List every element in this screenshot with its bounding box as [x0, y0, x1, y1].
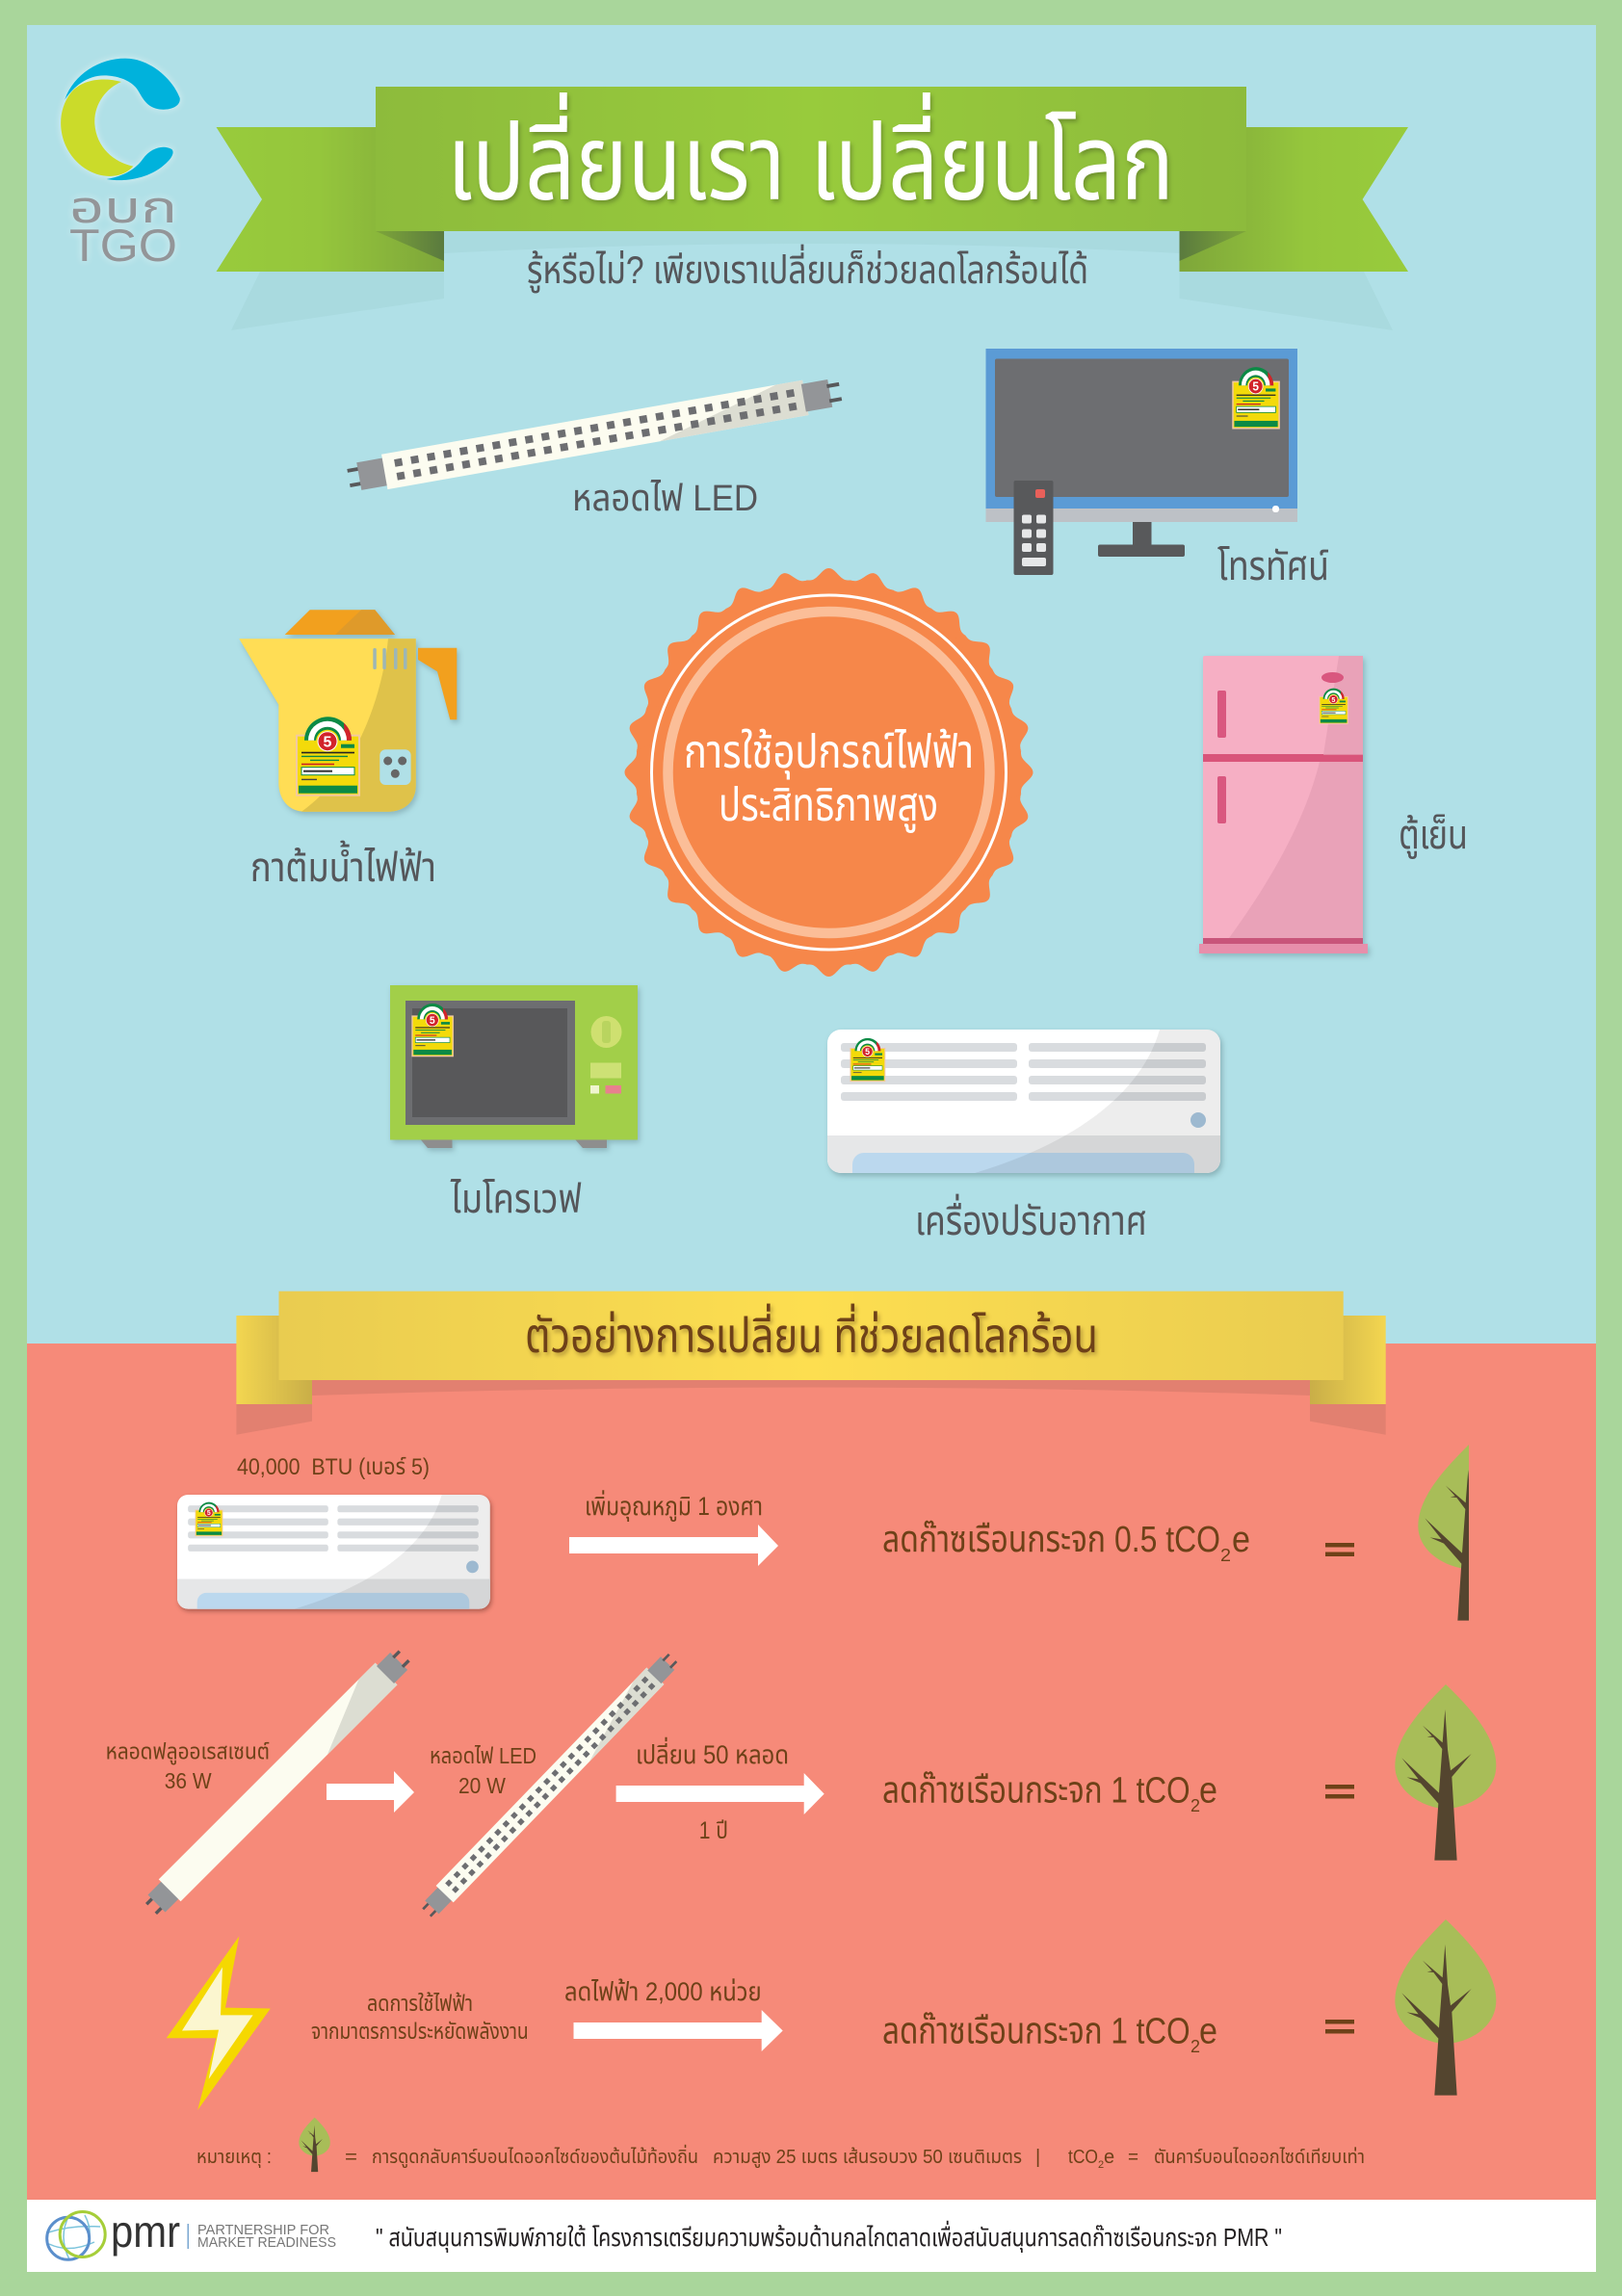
energy label on fridge — [1320, 689, 1348, 724]
ribbon main — [376, 87, 1246, 231]
energy label on AC: 5 — [865, 1047, 870, 1057]
reduction text: ลดก๊าซเรือนกระจก 1 tCO — [882, 2011, 1190, 2051]
legend note: หมายเหตุ : — [196, 2147, 272, 2168]
legend note: ความสูง 25 เมตร เส้นรอบวง 50 เซนติเมตร — [713, 2146, 1022, 2169]
yellow ribbon main — [279, 1292, 1344, 1380]
TV remote — [1013, 481, 1054, 575]
logo: TGO: TGO — [69, 220, 177, 271]
panel: red bottom section — [27, 1344, 1596, 2200]
half tree — [1418, 1445, 1469, 1621]
LED text: หลอดไฟ LED — [430, 1743, 536, 1768]
arrow — [616, 1773, 824, 1814]
logo: PMR: PARTNERSHIP FOR — [197, 2222, 329, 2238]
LED text — [430, 1743, 536, 1798]
LED tube — [418, 1650, 682, 1921]
row 3: electricity saving — [167, 1919, 1496, 2110]
small arrow — [327, 1771, 414, 1813]
legend note: = — [1128, 2147, 1138, 2168]
icon: air conditioner — [827, 1030, 1220, 1173]
reduction text: ลดก๊าซเรือนกระจก 1 tCO — [882, 1771, 1190, 1812]
icon: lightning bolt — [167, 1936, 271, 2110]
reduction text: e — [1199, 1771, 1217, 1812]
reduction text: 2 — [1190, 1796, 1200, 1815]
AC capacity text: 40,000 BTU (เบอร์ 5) — [237, 1454, 430, 1480]
legend note: ตันคาร์บอนไดออกไซด์เทียบเท่า — [1154, 2146, 1365, 2168]
yellow ribbon shadows — [236, 1380, 1386, 1435]
label: LED: หลอดไฟ LED — [572, 479, 758, 519]
equals — [1325, 1785, 1354, 1799]
ribbon reflections — [231, 231, 1393, 330]
energy label on kettle — [296, 717, 360, 796]
energy label on microwave: 5 — [430, 1015, 435, 1027]
saving text: ลดการใช้ไฟฟ้า — [367, 1991, 473, 2016]
title: เปลี่ยนเรา เปลี่ยนโลก — [447, 92, 1174, 222]
subtitle: รู้หรือไม่? เพียงเราเปลี่ยนก็ช่วยลดโลกร้อนได้ — [527, 244, 1088, 293]
reduction text: 2 — [1220, 1546, 1231, 1565]
energy label on fridge: 5 — [1331, 695, 1335, 704]
one year text: 1 ปี — [699, 1817, 728, 1844]
PMR globe — [47, 2211, 105, 2259]
section heading: ตัวอย่างการเปลี่ยน ที่ช่วยลดโลกร้อน — [525, 1303, 1098, 1363]
badge: high efficiency: ประสิทธิภาพสูง — [719, 780, 938, 833]
logo: TGO: อบก — [69, 182, 177, 232]
energy label on kettle: 5 — [324, 735, 332, 751]
green ribbon banner — [216, 87, 1408, 330]
logo: PMR: MARKET READINESS — [197, 2234, 336, 2251]
energy label on TV: 5 — [1252, 379, 1259, 394]
condition text: เพิ่มอุณหภูมิ 1 องศา — [585, 1490, 763, 1522]
label: kettle: กาต้มน้ำไฟฟ้า — [250, 840, 436, 890]
AC small icon — [177, 1495, 490, 1609]
legend note: 2 — [1098, 2159, 1104, 2171]
reduction text: e — [1232, 1520, 1250, 1560]
label: fridge: ตู้เย็น — [1399, 812, 1468, 859]
logo: TGO — [61, 59, 180, 271]
tree — [1395, 1684, 1496, 1861]
legend note: การดูดกลับคาร์บอนไดออกไซด์ของต้นไม้ท้องถิ่น — [372, 2144, 698, 2169]
equals — [1325, 2020, 1354, 2034]
reduction text: 2 — [1190, 2037, 1200, 2056]
energy label on TV — [1232, 367, 1280, 430]
label: air conditioner: เครื่องปรับอากาศ — [915, 1193, 1147, 1243]
row 2: LED replacement — [106, 1645, 1496, 1921]
energy label on AC — [850, 1038, 885, 1082]
legend note — [196, 2118, 1365, 2172]
badge text: การใช้อุปกรณ์ไฟฟ้า — [684, 727, 974, 780]
fluorescent text: 36 W — [165, 1768, 212, 1793]
arrow — [574, 2010, 783, 2051]
badge: high efficiency — [624, 568, 1033, 977]
yellow ribbon tails — [236, 1316, 312, 1404]
panel: blue top section — [27, 25, 1596, 1344]
icon: television — [986, 349, 1297, 575]
saving text — [311, 1991, 529, 2044]
equals — [1325, 1543, 1354, 1556]
swap text: เปลี่ยน 50 หลอด — [636, 1736, 789, 1769]
legend note: | — [1035, 2147, 1040, 2168]
icon: kettle — [239, 610, 457, 812]
AC small icon: 5 — [207, 1510, 211, 1517]
legend note: tCO — [1068, 2147, 1098, 2168]
label: TV: โทรทัศน์ — [1217, 543, 1329, 588]
row 1: air conditioner temperature — [177, 1445, 1519, 1621]
icon: LED tube — [346, 374, 844, 496]
units text: ลดไฟฟ้า 2,000 หน่วย — [564, 1977, 762, 2006]
yellow ribbon banner — [236, 1292, 1386, 1435]
energy label on microwave — [411, 1004, 454, 1057]
tree — [1395, 1919, 1496, 2096]
icon: microwave — [390, 985, 638, 1148]
fluorescent text: หลอดฟลูออเรสเซนต์ — [106, 1739, 270, 1766]
footer statement: " สนับสนุนการพิมพ์ภายใต้ โครงการเตรียมความพร้อมด้านกลไกตลาดเพื่อสนับสนุนการลดก๊าซเรือนกระจก PMR " — [376, 2220, 1282, 2253]
icon: fridge — [1199, 656, 1368, 953]
legend note: = — [345, 2147, 357, 2168]
panel: white footer — [27, 2200, 1596, 2272]
logo: PMR: pmr — [111, 2206, 180, 2257]
fluorescent tube — [141, 1645, 415, 1919]
ribbon tails — [216, 127, 444, 272]
label: microwave: ไมโครเวฟ — [450, 1176, 582, 1221]
reduction text: e — [1199, 2011, 1217, 2051]
saving text: จากมาตรการประหยัดพลังงาน — [311, 2019, 529, 2044]
fluorescent text — [106, 1739, 270, 1793]
reduction text: ลดก๊าซเรือนกระจก 0.5 tCO — [882, 1520, 1220, 1560]
logo: PMR — [47, 2206, 336, 2259]
legend tree icon — [299, 2118, 330, 2172]
arrow — [569, 1525, 778, 1566]
LED text: 20 W — [458, 1773, 506, 1798]
legend note: e — [1104, 2147, 1114, 2168]
badge scalloped edge — [624, 568, 1033, 977]
